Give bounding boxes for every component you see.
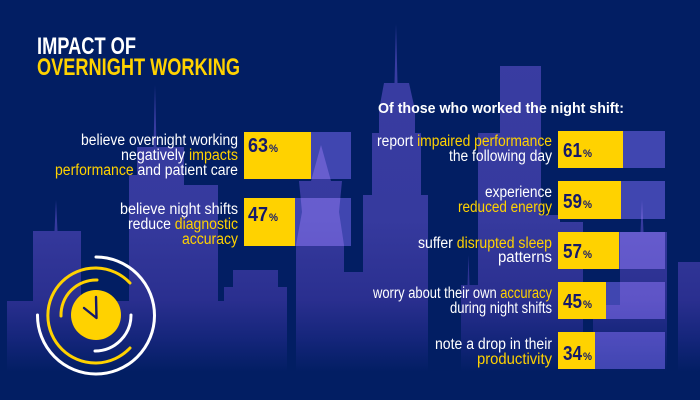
stat: 63%: % [269,143,278,155]
title: OVERNIGHT WORKING [37,54,240,81]
stat: 45%: 45 [563,291,582,313]
stat: 59%: reduced energy [458,199,552,216]
title [37,33,240,81]
stat: 59%: experience [485,184,552,201]
stat: 47%: % [269,212,278,224]
stat: 45%: worry about their own accuracy [372,285,552,302]
stat: 57%: patterns [498,249,552,266]
stat: 45%: % [583,299,592,311]
stat: 47% [120,198,351,248]
stat: 61%: % [583,148,592,160]
stat: 47%: 47 [248,204,268,226]
stat: 34%: note a drop in their [435,336,552,353]
stat: 45% [372,282,665,319]
stat: 34%: % [583,351,592,363]
title: IMPACT OF [37,33,136,60]
stat: 34%: productivity [477,351,552,368]
stat: 59% [458,181,665,219]
stat: 57% [418,232,665,269]
stat: 61%: report impaired performance [377,133,552,150]
stat: 61% [377,131,665,168]
stat: 59%: 59 [563,191,582,213]
stat: 45%: during night shifts [450,300,552,317]
stat: 47%: believe night shifts [120,201,238,218]
stat: 47%: accuracy [182,231,238,248]
stat: 34% [435,332,665,369]
stat: 63% [55,132,351,179]
icon: clock [37,257,154,374]
stat: 57%: 57 [563,241,582,263]
subheading: Of those who worked the night shift: [378,100,624,117]
stat: 63%: believe overnight working [81,132,238,149]
stat: 47%: reduce diagnostic [128,216,238,233]
stat: 57%: suffer disrupted sleep [418,235,552,252]
stat: 61%: 61 [563,140,582,162]
stat: 57%: % [583,249,592,261]
stat: 63%: 63 [248,135,268,157]
stat: 34%: 34 [563,343,583,365]
stat: 63%: negatively impacts [121,147,238,164]
stat: 63%: performance and patient care [55,162,238,179]
stat: 59%: % [583,199,592,211]
stat: 61%: the following day [449,148,552,165]
